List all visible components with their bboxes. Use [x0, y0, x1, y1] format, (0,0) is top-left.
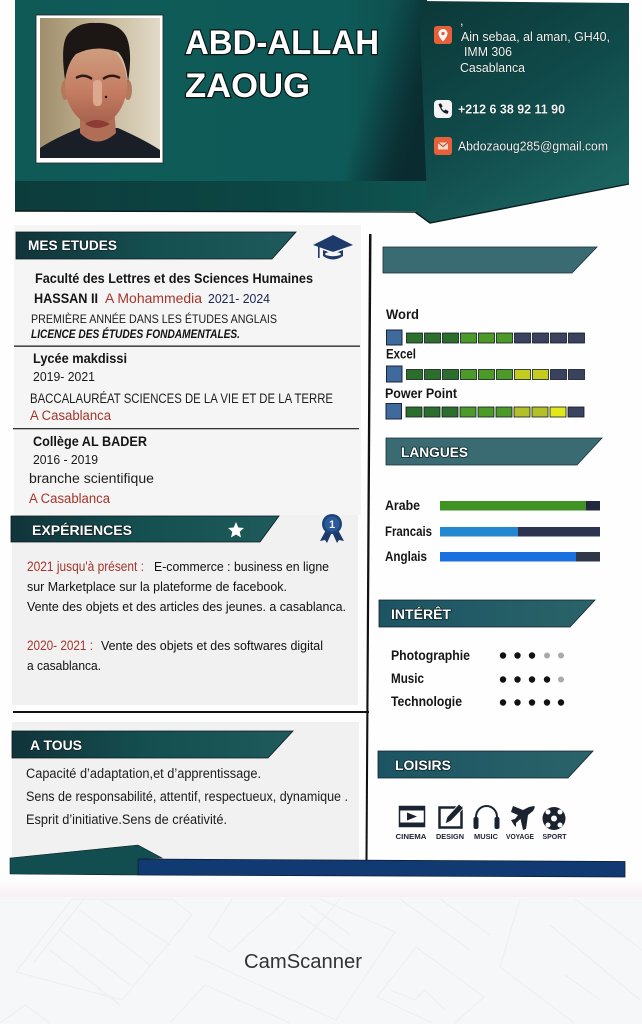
address: , [460, 14, 463, 28]
panel: a tous [12, 722, 359, 860]
experience 2021 [27, 559, 346, 614]
skill: power point: Power Point [385, 386, 457, 401]
education: lycée: 2019- 2021 [33, 369, 95, 384]
education: collège: 2016 - 2019 [33, 452, 98, 467]
heading: langues [386, 438, 602, 465]
skill: excel: Excel [386, 346, 416, 362]
icon: plane: VOYAGE [506, 834, 534, 841]
language: francais: Francais [385, 524, 432, 539]
icons: hobbies [396, 804, 567, 841]
header right panel [415, 1, 629, 223]
interest: music: Music [391, 671, 424, 686]
icon: location [434, 26, 452, 44]
icon: ribbon: 1 [329, 519, 335, 531]
icon: star [228, 522, 244, 538]
education: collège [29, 434, 154, 506]
icon: email [434, 137, 452, 155]
panel: CamScanner footer [0, 897, 642, 1024]
education: lycée [30, 351, 333, 423]
heading: expériences [11, 516, 279, 542]
heading: intérêt: INTÉRÊT [391, 607, 452, 622]
panel: études [13, 225, 361, 515]
education: collège: Collège AL BADER [33, 434, 147, 449]
heading: mes etudes [16, 232, 296, 259]
icon: graduation cap [313, 235, 353, 260]
education: lycée: Lycée makdissi [33, 351, 127, 366]
qualities text: Esprit d’initiative.Sens de créativité. [26, 812, 227, 827]
CamScanner label: CamScanner [244, 951, 362, 973]
education: collège: A Casablanca [29, 491, 110, 506]
heading: blank skills [383, 247, 597, 273]
name: ZAOUG [185, 67, 310, 105]
icon: design: DESIGN [436, 834, 464, 841]
icon: phone [434, 100, 452, 118]
experience 2020: Vente des objets et des softwares digital [101, 639, 323, 653]
heading: loisirs: LOISIRS [395, 758, 451, 773]
interest: photographie: Photographie [391, 648, 470, 663]
chart: languages [385, 498, 600, 564]
phone number: +212 6 38 92 11 90 [458, 102, 565, 116]
language: arabe [385, 498, 600, 513]
skill: word: Word [386, 307, 419, 322]
education: faculté: 2021- 2024 [208, 291, 270, 306]
address: Casablanca [460, 61, 525, 75]
chart: interests [391, 648, 564, 709]
education: lycée: A Casablanca [30, 408, 111, 423]
address: IMM 306 [464, 45, 512, 59]
experience 2020: 2020- 2021 : [27, 638, 93, 653]
icon: ribbon [320, 514, 344, 543]
education: faculté: PREMIÈRE ANNÉE DANS LES ÉTUDES ANGLAIS [31, 311, 277, 326]
icon: cinema: CINEMA [396, 834, 426, 841]
icon: cinema [396, 806, 426, 841]
experience 2021: sur Marketplace sur la plateforme de facebook. [27, 580, 287, 594]
skill: word [386, 307, 584, 345]
email: Abdozaoug285@gmail.com [458, 140, 608, 154]
language: arabe: Arabe [385, 498, 420, 513]
panel: expériences [11, 514, 358, 705]
interest: technologie [391, 694, 564, 709]
qualities text [26, 766, 348, 827]
interest: music [391, 671, 564, 686]
experience 2021: 2021 jusqu'à présent : [27, 559, 144, 574]
icon: ball [542, 807, 567, 841]
header main band [15, 0, 427, 211]
experience 2020: a casablanca. [27, 659, 101, 673]
footer pattern [0, 899, 642, 1023]
address: Ain sebaa, al aman, GH40, [461, 30, 610, 44]
chart: software skills [385, 307, 584, 419]
icon: design [436, 804, 464, 841]
vertical divider [366, 234, 372, 860]
icon: music: MUSIC [474, 834, 498, 841]
icon: plane [506, 806, 535, 841]
experience 2021: E-commerce : business en ligne [154, 560, 329, 574]
education: faculté: Faculté des Lettres et des Sciences Humaines [35, 271, 313, 286]
name [185, 24, 379, 105]
photo [36, 15, 163, 163]
heading: expériences: EXPÉRIENCES [32, 523, 132, 538]
heading: a tous [12, 731, 293, 758]
education: faculté: A Mohammedia [105, 291, 203, 306]
icon: ball: SPORT [542, 834, 567, 841]
education: lycée: BACCALAURÉAT SCIENCES DE LA VIE ET DE LA TERRE [30, 391, 333, 406]
header edge shadow [15, 184, 629, 223]
heading: intérêt [379, 600, 595, 627]
qualities text: Sens de responsabilité, attentif, respectueux, dynamique . [26, 789, 348, 804]
qualities text: Capacité d’adaptation,et d’apprentissage. [26, 766, 261, 781]
experience 2021: Vente des objets et des articles des jeunes. a casablanca. [27, 600, 346, 614]
name: ABD-ALLAH [185, 24, 379, 62]
icon: music [474, 806, 500, 841]
experience 2020 [27, 638, 323, 673]
heading: langues: LANGUES [401, 445, 468, 460]
interest: technologie: Technologie [391, 694, 462, 709]
panel: header [15, 0, 629, 223]
heading: mes etudes: MES ETUDES [28, 238, 117, 253]
skill: power point [385, 386, 584, 419]
language: francais [385, 524, 600, 539]
education: faculté [31, 271, 313, 341]
header lower strip [15, 181, 427, 211]
language: anglais: Anglais [385, 549, 427, 564]
education: collège: branche scientifique [29, 471, 154, 486]
skill: excel [386, 346, 584, 382]
heading: loisirs [378, 751, 593, 778]
language: anglais [385, 549, 600, 564]
education: faculté: LICENCE DES ÉTUDES FONDAMENTALES. [31, 328, 240, 341]
address [460, 14, 610, 75]
footer bar of the CV [10, 845, 625, 877]
education: faculté: HASSAN II [34, 291, 98, 306]
heading: a tous: A TOUS [30, 738, 82, 753]
interest: photographie [391, 648, 564, 663]
